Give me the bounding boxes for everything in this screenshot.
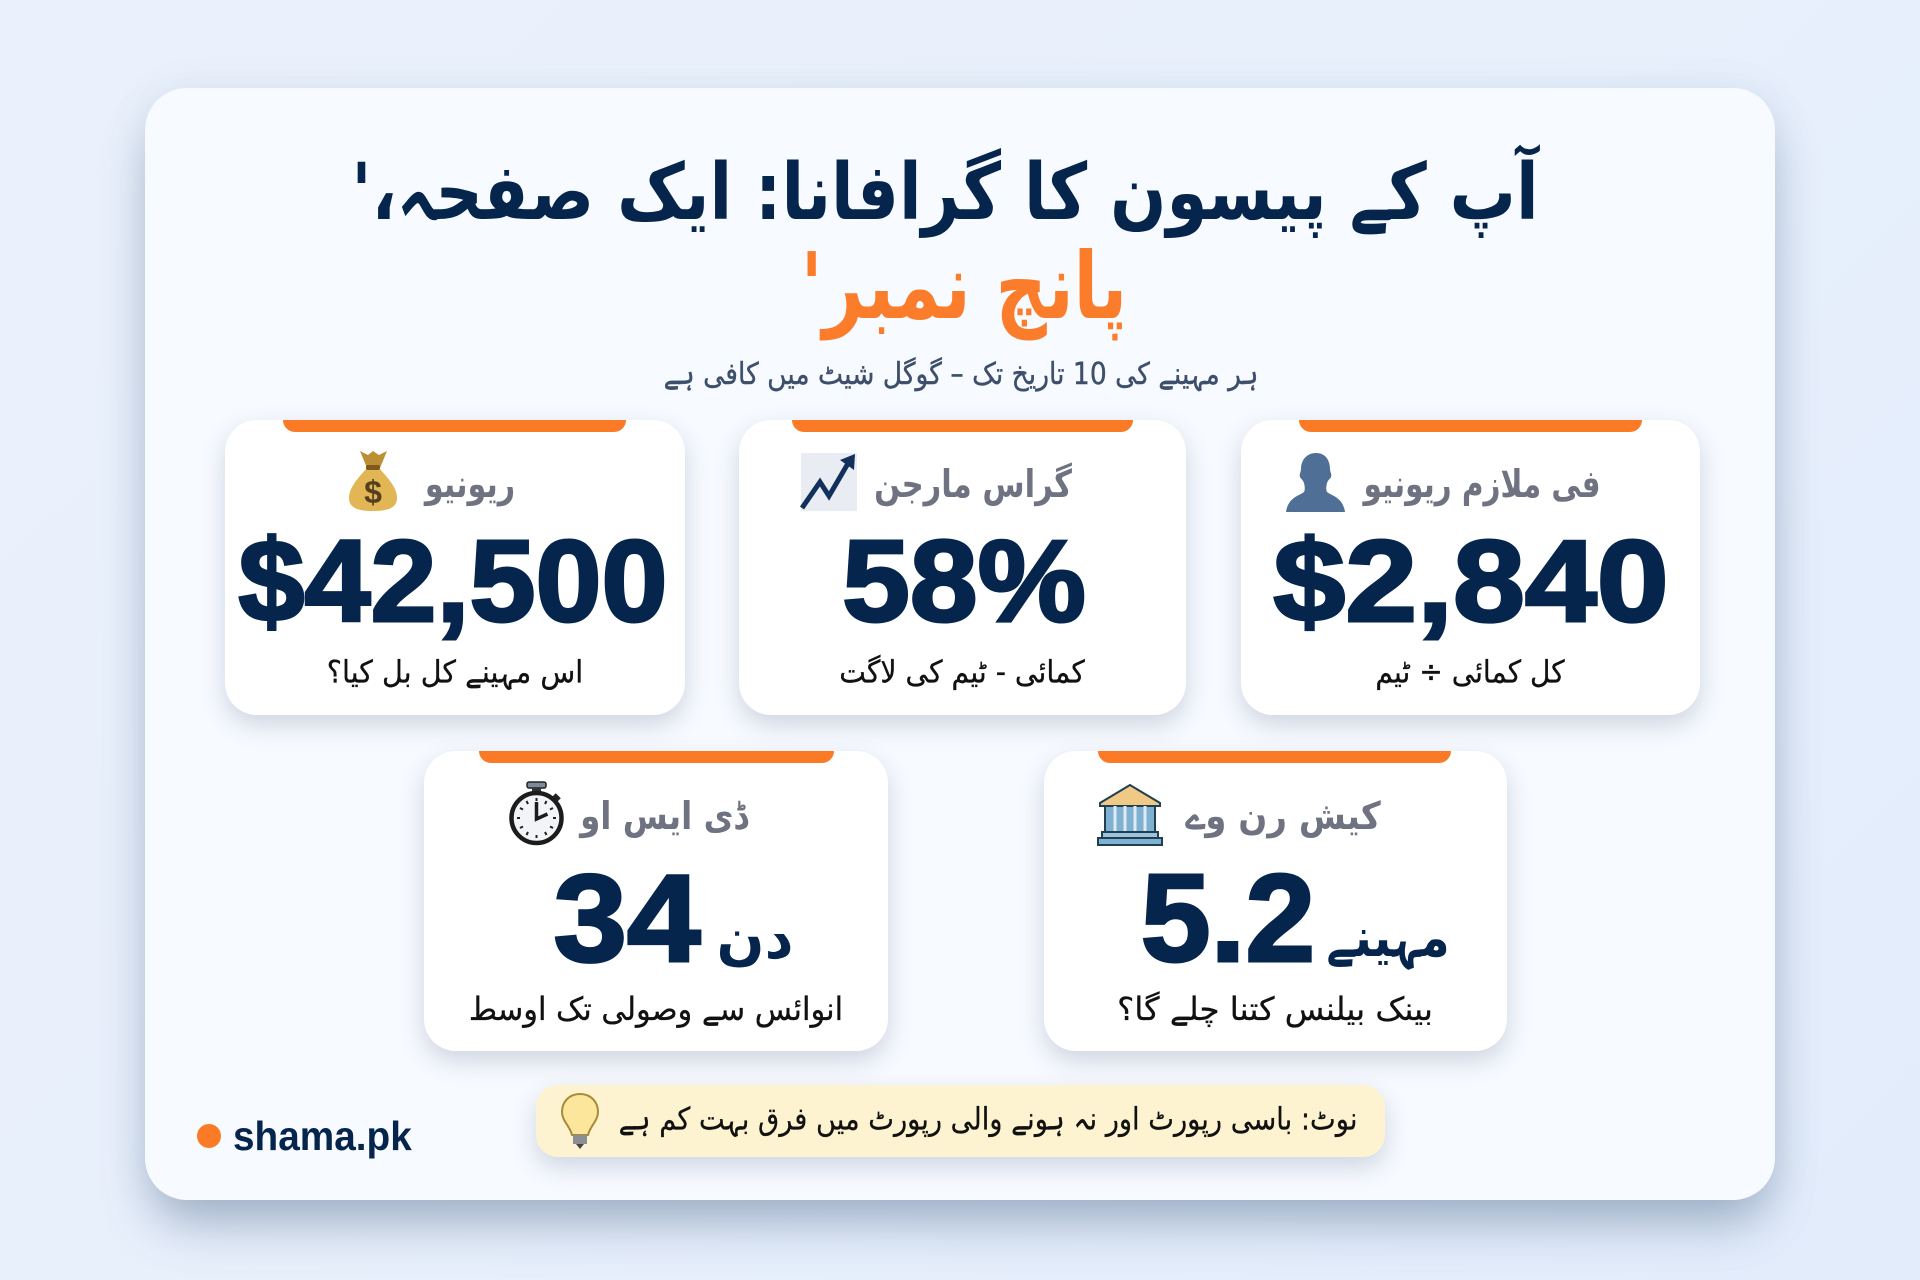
caption: revenue per employee: کل کمائی ÷ ٹیم xyxy=(1375,654,1565,690)
title line 1: آپ کے پیسون کا گرافانا: ایک صفحہ،' xyxy=(351,148,1539,238)
label: revenue per employee: فی ملازم ریونیو xyxy=(1363,462,1601,506)
note text: نوٹ: باسی رپورٹ اور نہ ہونے والی رپورٹ میں فرق بہت کم ہے xyxy=(619,1102,1357,1138)
accent bar: gross margin xyxy=(792,420,1133,432)
card: revenue xyxy=(225,420,685,715)
icon: chart xyxy=(800,453,857,511)
icon: person xyxy=(1286,453,1345,512)
accent bar: revenue per employee xyxy=(1299,420,1642,432)
accent bar: revenue xyxy=(283,420,626,432)
icon: stopwatch xyxy=(509,781,564,846)
label: revenue: ریونیو xyxy=(425,462,515,506)
value: gross margin: 58% xyxy=(842,516,1086,646)
note box xyxy=(536,1085,1385,1157)
value: revenue: $42,500 xyxy=(239,516,667,646)
value: DSO: 34 xyxy=(553,850,701,988)
icon: money bag: $ xyxy=(364,474,382,510)
title line 2: پانچ نمبر' xyxy=(801,233,1127,340)
label: cash runway: کیش رن وے xyxy=(1185,794,1381,838)
card: DSO xyxy=(424,751,888,1051)
panel: background sheet xyxy=(145,88,1775,1200)
label: gross margin: گراس مارجن xyxy=(874,462,1072,506)
card: gross margin xyxy=(739,420,1186,715)
icon: light bulb xyxy=(561,1093,599,1149)
unit: days: دن xyxy=(717,904,793,972)
unit: months: مہینے xyxy=(1326,906,1450,969)
caption: revenue: اس مہینے کل بل کیا؟ xyxy=(327,654,583,690)
subtitle: ہر مہینے کی 10 تاریخ تک – گوگل شیٹ میں کافی ہے xyxy=(664,357,1258,392)
accent bar: cash runway xyxy=(1098,751,1451,763)
card: revenue per employee xyxy=(1241,420,1700,715)
value: revenue per employee: $2,840 xyxy=(1273,516,1669,646)
caption: gross margin: کمائی - ٹیم کی لاگت xyxy=(839,654,1085,690)
value: cash runway: 5.2 xyxy=(1141,850,1315,988)
label: DSO: ڈی ایس او xyxy=(580,794,748,838)
card: cash runway xyxy=(1044,751,1507,1051)
caption: DSO: انوائس سے وصولی تک اوسط xyxy=(469,990,843,1028)
icon: bank xyxy=(1097,784,1163,846)
brand name: shama.pk xyxy=(233,1113,412,1159)
accent bar: DSO xyxy=(479,751,834,763)
icon: money bag xyxy=(349,451,397,511)
brand dot xyxy=(197,1124,221,1148)
caption: cash runway: بینک بیلنس کتنا چلے گا؟ xyxy=(1117,990,1433,1028)
